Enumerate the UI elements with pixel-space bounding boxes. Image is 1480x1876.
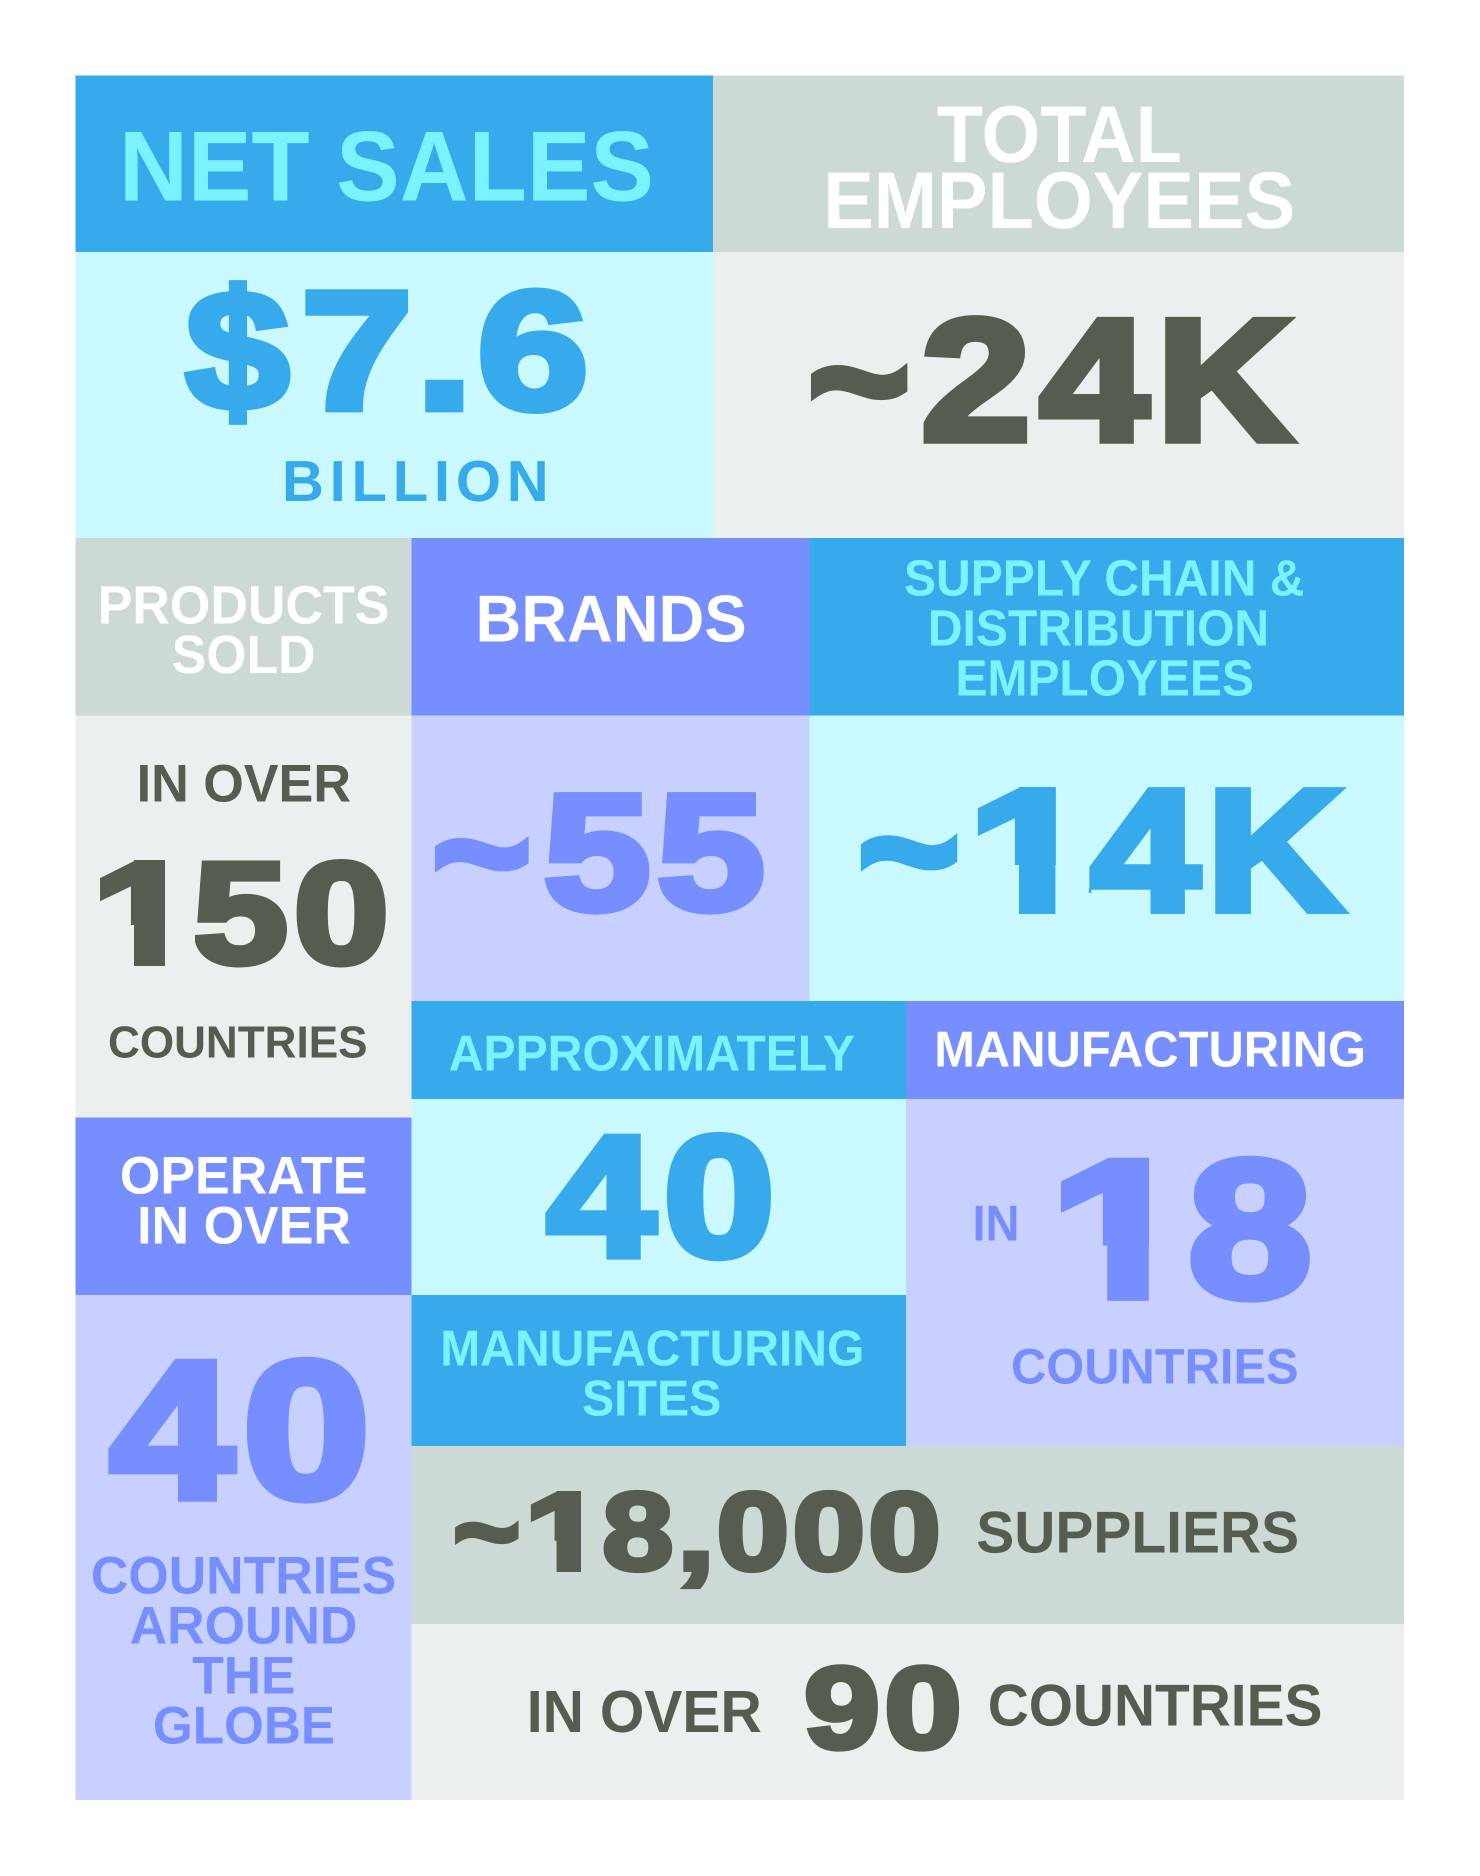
label: suppliers: SUPPLIERS [976,1500,1299,1566]
heading line: employees: EMPLOYEES [956,650,1254,707]
label: countries: COUNTRIES [988,1673,1322,1739]
panel: manufacturing heading [906,1001,1404,1099]
label: in over: IN OVER [527,1678,762,1745]
number: 40: 4 [547,1101,655,1293]
number: ~18,000: 1 [524,1470,604,1594]
label line: globe: GLOBE [153,1697,335,1756]
number: 90: 9 [804,1643,880,1773]
panel: total employees value [713,252,1404,538]
number: ~14K: 1 [968,753,1092,947]
number: $7.6: 6 [477,257,588,445]
panel: approximately heading [412,1001,906,1099]
heading line: supply chain &: SUPPLY CHAIN & [904,550,1304,607]
number: ~18,000: 0 [793,1470,865,1594]
number: ~24K: ~ [808,283,910,477]
number: $7.6: $ [186,257,289,445]
panel: manufacturing sites label [412,1295,906,1446]
heading line: products: PRODUCTS [98,575,389,635]
panel: suppliers [412,1446,1404,1624]
number: 40: 4 [110,1321,234,1539]
number: ~14K: ~ [858,753,960,947]
number: ~18,000: ~ [453,1470,520,1594]
panel: net sales value [76,252,713,538]
heading line: in over: IN OVER [137,1197,351,1256]
panel: brands value [412,716,810,1001]
number: 18: 1 [1049,1120,1190,1338]
number: ~18,000: 0 [868,1470,941,1594]
panel: operate value [76,1295,412,1800]
label line: around: AROUND [130,1597,357,1656]
panel: total employees heading [713,76,1404,252]
number: ~24K: 4 [1040,283,1148,477]
label: in over: IN OVER [137,755,351,814]
label: in: IN [972,1195,1020,1252]
number: ~18,000: , [677,1470,715,1594]
heading: manufacturing: MANUFACTURING [934,1021,1366,1078]
number: 90: 0 [884,1643,962,1773]
panel: supply chain heading [810,538,1404,716]
number: 18: 8 [1188,1120,1312,1338]
label: countries: COUNTRIES [108,1016,368,1067]
number: $7.6: . [416,257,473,445]
number: 40: 0 [243,1321,370,1539]
label line: countries: COUNTRIES [91,1546,396,1605]
panel: supply chain value [810,716,1404,1001]
panel: brands heading [412,538,810,716]
panel: operate heading [76,1118,412,1295]
number: ~14K: K [1207,753,1343,947]
label line: the: THE [192,1647,295,1706]
heading line: sold: SOLD [172,625,316,685]
label: billion: BILLION [282,449,549,514]
panel: products sold value [76,716,412,1118]
heading line: operate: OPERATE [120,1147,367,1206]
panel: net sales heading [76,76,713,252]
panel: manufacturing sites value [412,1099,906,1295]
number: 40: 0 [664,1101,775,1293]
number: 150: 1 [92,833,196,994]
number: ~55: ~ [432,760,531,944]
heading line: total: TOTAL [937,90,1182,180]
heading: approximately: APPROXIMATELY [449,1025,855,1082]
number: ~24K: K [1157,283,1292,477]
number: ~55: 5 [657,760,765,944]
number: ~55: 5 [544,760,650,944]
number: ~18,000: 8 [602,1470,673,1594]
heading: net sales: NET SALES [119,112,654,222]
panel: products sold heading [76,538,412,716]
label line: sites: SITES [582,1370,721,1427]
number: ~18,000: 0 [717,1470,789,1594]
number: $7.6: 7 [301,257,412,445]
number: ~14K: 4 [1091,753,1200,947]
number: 150: 0 [294,833,389,994]
label: countries: COUNTRIES [1011,1338,1299,1394]
number: ~24K: 2 [921,283,1031,477]
heading line: distribution: DISTRIBUTION [928,600,1269,657]
number: 150: 5 [193,833,288,994]
panel: supplier countries [412,1624,1404,1800]
heading: brands: BRANDS [476,583,747,657]
heading line: employees: EMPLOYEES [823,156,1295,246]
label line: manufacturing: MANUFACTURING [440,1320,864,1377]
panel: manufacturing countries value [906,1099,1404,1446]
